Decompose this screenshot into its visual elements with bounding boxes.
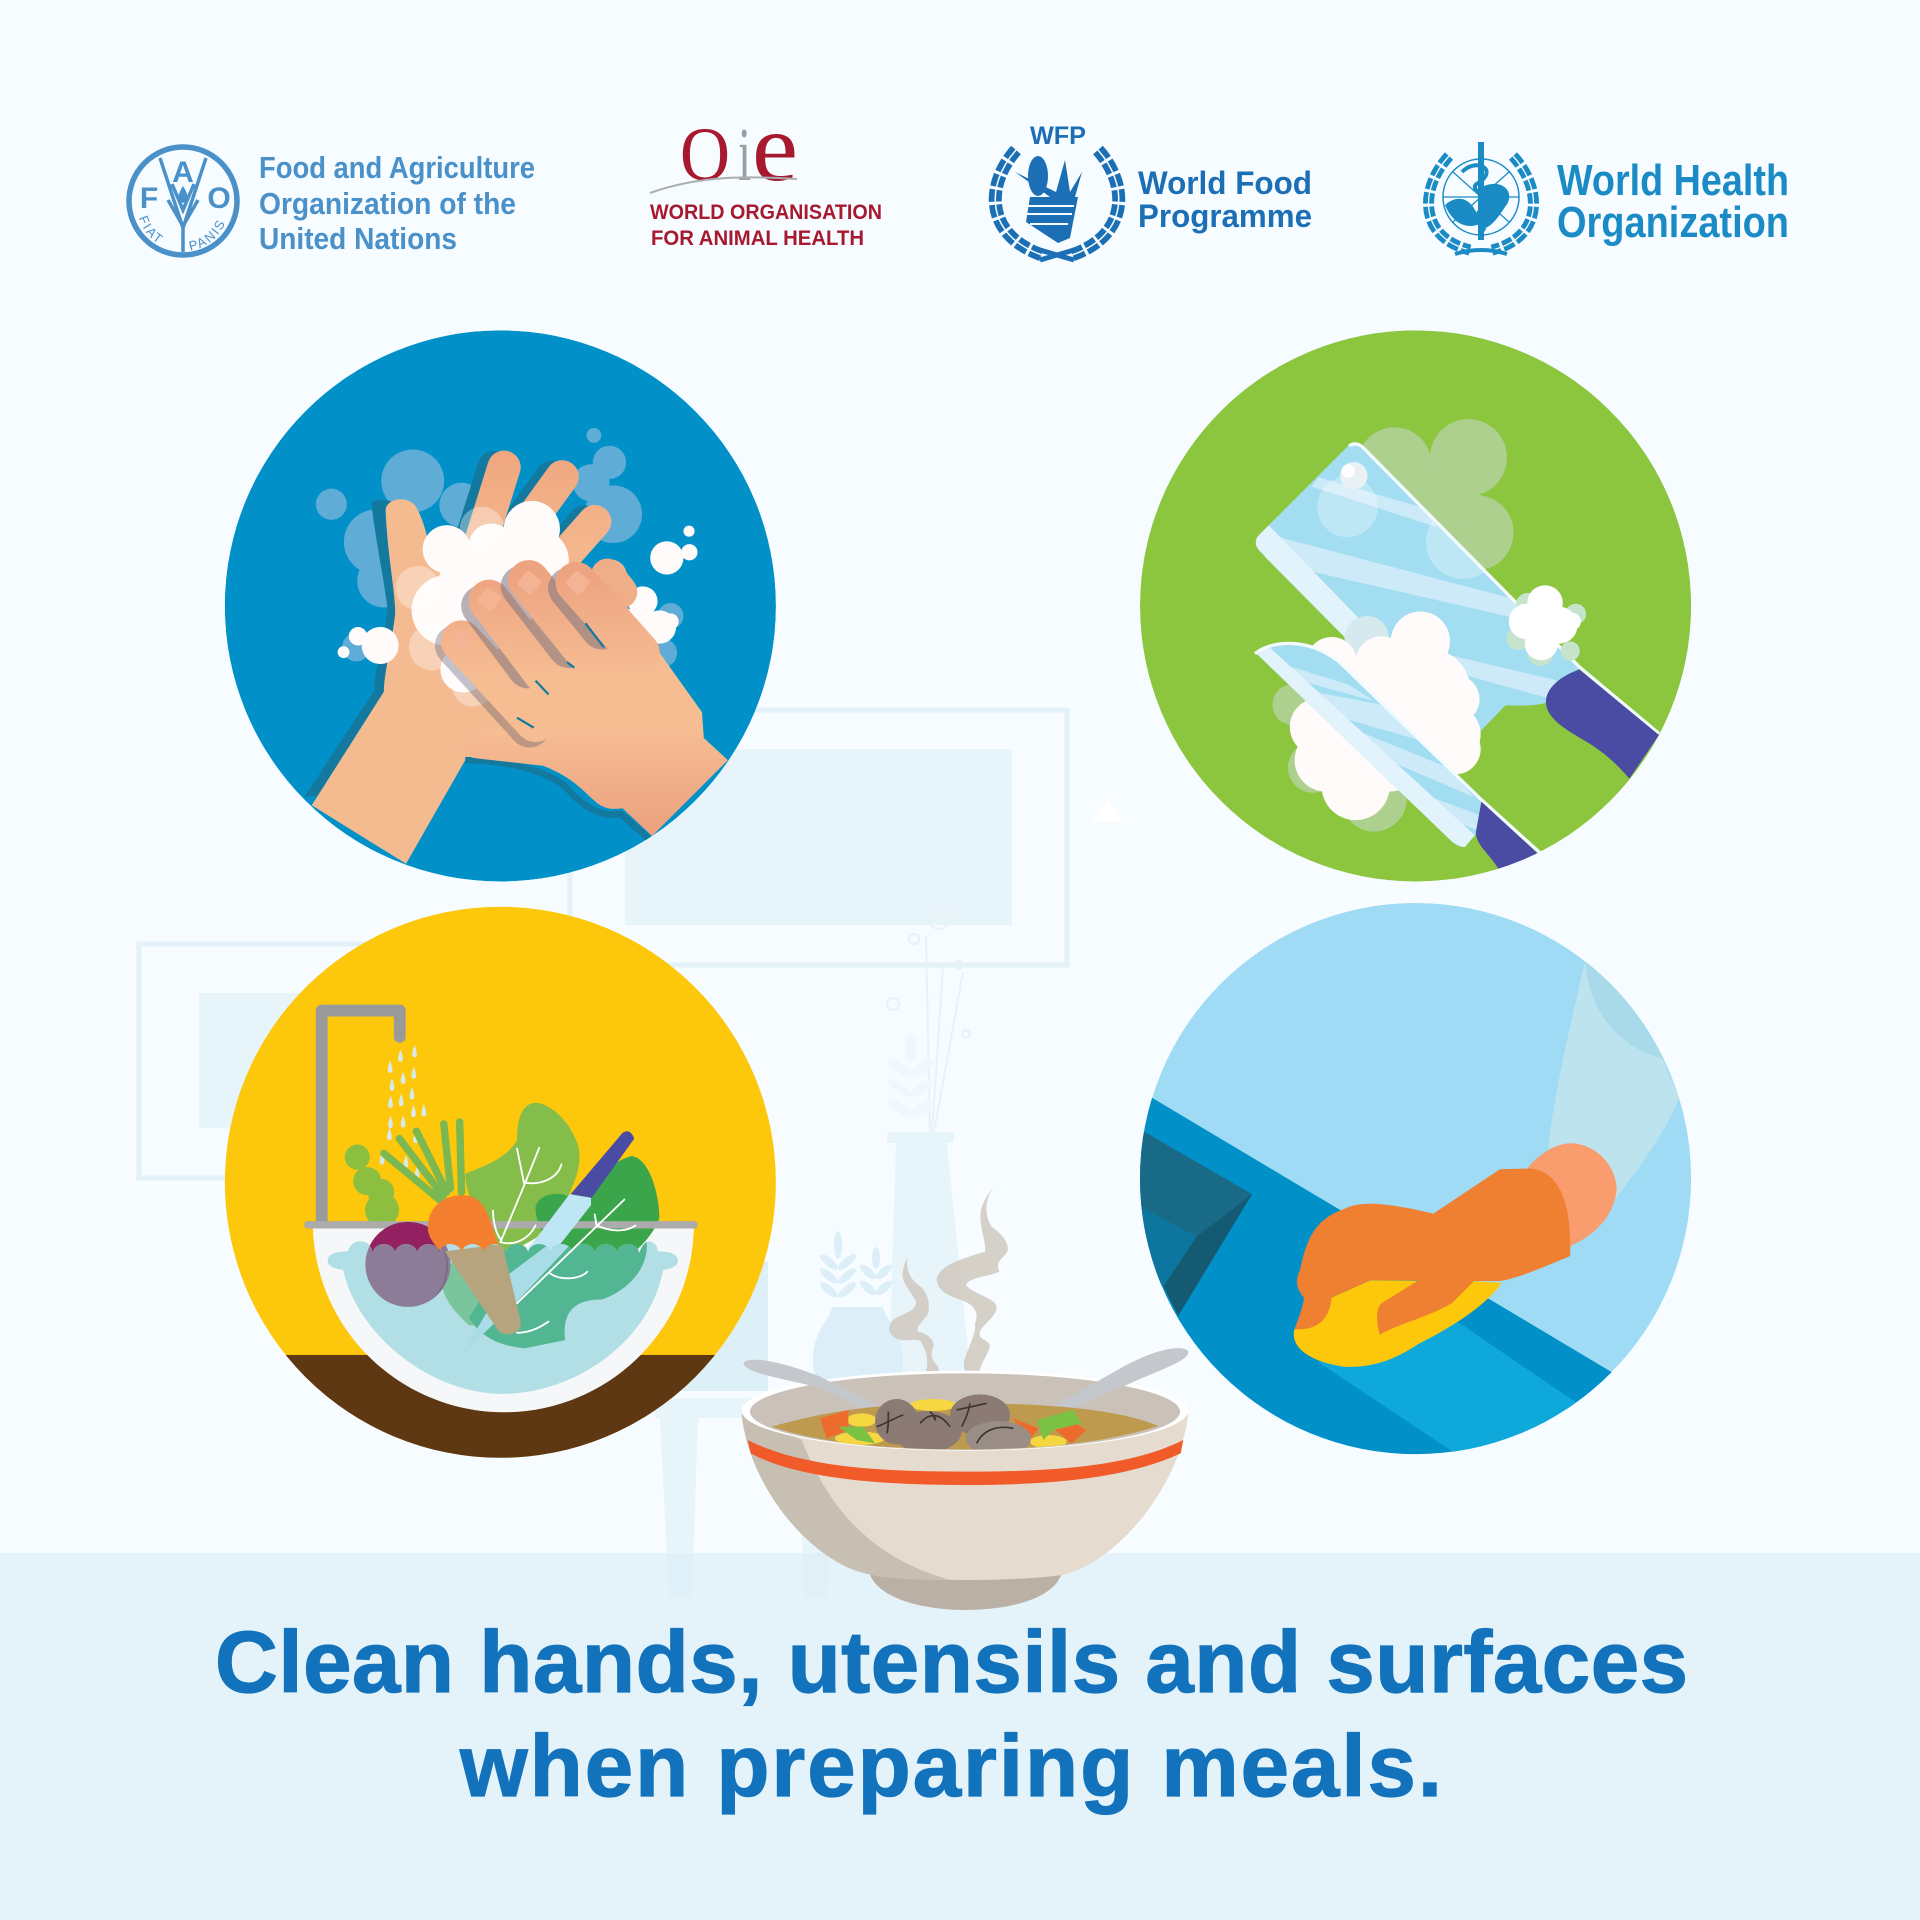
bottom band (0, 1553, 1920, 1920)
logo: WFP: WFP (1030, 122, 1086, 150)
counter (286, 1355, 715, 1458)
FAO emblem: FIAT (139, 216, 164, 242)
spoons (743, 1348, 1188, 1418)
dark-green leaf (536, 1156, 660, 1253)
small knife handle (1476, 802, 1538, 871)
WFP name (1138, 165, 1312, 234)
soap suds behind hands (316, 428, 683, 667)
counter recess (1134, 1126, 1252, 1316)
FAO emblem: PANIS (189, 220, 224, 250)
WHO emblem (1429, 142, 1533, 254)
knife handle (571, 1131, 634, 1198)
steam (889, 1185, 1008, 1393)
suds behind cleaver (1272, 419, 1514, 832)
FAO emblem (126, 144, 240, 258)
WFP name: World Food (1138, 165, 1312, 201)
wiped shine (1548, 961, 1679, 1200)
back hand shadow (304, 467, 584, 797)
panel: wiping surfaces (1140, 903, 1691, 1454)
logo: WFP (995, 122, 1312, 260)
FAO name: Food and Agriculture (259, 150, 535, 185)
logo: OIE (650, 94, 882, 250)
counter highlight (1319, 1322, 1576, 1452)
table legs over band (667, 1553, 829, 1597)
leaf veins (493, 1148, 635, 1333)
submerged vegetables (365, 1242, 647, 1353)
small knife (1255, 643, 1540, 853)
soup toppings (820, 1394, 1087, 1456)
forearm (1528, 1143, 1617, 1246)
logo: WHO (1429, 142, 1789, 254)
FAO name: Organization of the (259, 186, 516, 221)
logo: OIE: e (752, 94, 798, 202)
lower shadow of front hand (465, 760, 650, 840)
faint kitchen background scene (139, 710, 1122, 1597)
orange stripe (748, 1440, 1183, 1485)
FAO name (259, 150, 535, 256)
foam on cleaver edge (1507, 585, 1586, 666)
logo: FAO (126, 144, 535, 258)
logo: OIE: FOR ANIMAL HEALTH (651, 227, 864, 250)
front hand (449, 570, 728, 836)
green onions (384, 1122, 462, 1200)
WFP name: Programme (1138, 198, 1312, 234)
light-green leaf (465, 1103, 579, 1255)
counter top (1140, 1098, 1612, 1454)
lettuce sprig (345, 1145, 399, 1227)
rim of the sink (304, 1221, 698, 1228)
panel: washing vegetables (210, 907, 790, 1481)
logo: OIE: WORLD ORGANISATION (650, 201, 882, 224)
glass bowl (313, 1228, 694, 1412)
logo: OIE: O (680, 113, 730, 197)
large cleaver (1252, 444, 1659, 753)
orange glove (1295, 1169, 1570, 1335)
faucet (322, 1011, 400, 1222)
logo: OIE: i (738, 113, 751, 197)
FAO emblem: A (172, 156, 194, 189)
soup bowl (742, 1185, 1188, 1610)
water in bowl (328, 1241, 678, 1394)
FAO name: United Nations (259, 221, 457, 256)
bowl foot (868, 1567, 1063, 1610)
knife blade top (528, 1194, 591, 1252)
FAO emblem: O (207, 182, 231, 215)
WHO name: World Health (1557, 156, 1789, 205)
water drops (380, 1045, 426, 1179)
panel: cleaning knives (1140, 330, 1691, 882)
translucent foam over skin (396, 507, 504, 707)
WFP emblem (995, 150, 1119, 260)
title (215, 1614, 1688, 1815)
FAO emblem: F (140, 182, 158, 215)
bowl body (742, 1413, 1188, 1580)
beet (370, 1222, 440, 1253)
sponge (1294, 1280, 1502, 1367)
panel: washing hands (225, 330, 776, 882)
large foam (1290, 611, 1481, 820)
carrot top (428, 1195, 499, 1252)
WHO name (1557, 156, 1789, 247)
white foam (338, 501, 698, 692)
WHO name: Organization (1557, 198, 1789, 247)
title line 1: Clean hands, utensils and surfaces (215, 1614, 1688, 1711)
title line 2: when preparing meals. (459, 1718, 1442, 1815)
rim (742, 1371, 1188, 1451)
back hand (312, 467, 610, 864)
cleaver handle (1546, 670, 1659, 779)
soup (753, 1400, 1187, 1453)
